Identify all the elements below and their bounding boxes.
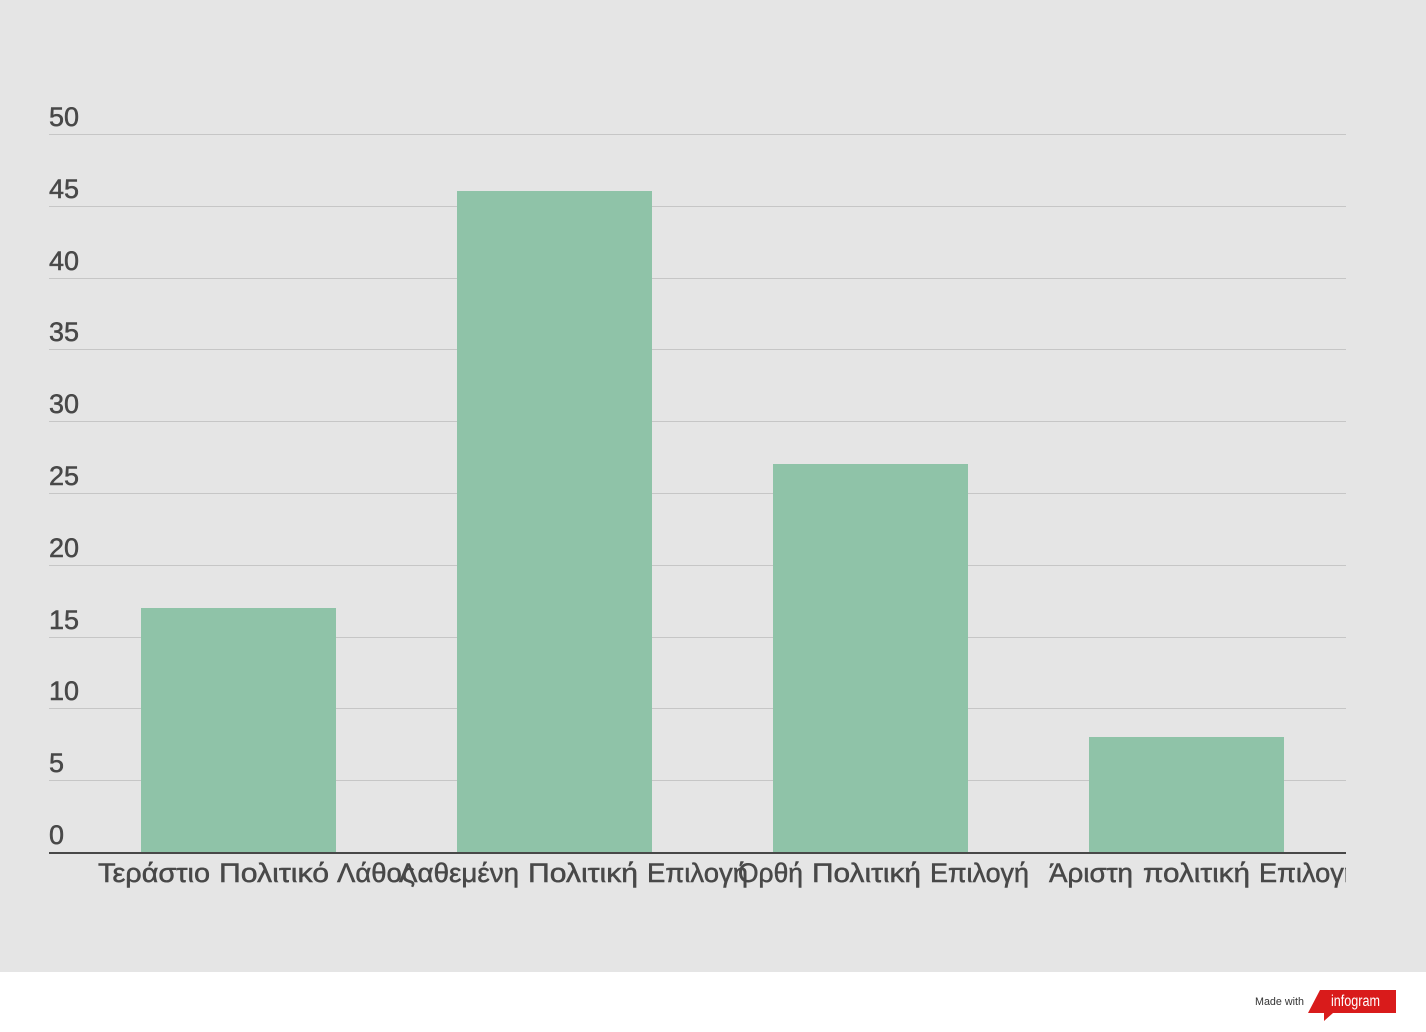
x axis category labels: Πολιτική — [528, 858, 638, 888]
footer: made with infogram: Made with — [1255, 996, 1304, 1008]
bar chart bars — [141, 191, 1284, 852]
y axis labels: 10 — [49, 676, 79, 706]
x axis category labels: Πολιτικό — [219, 858, 329, 888]
y axis labels: 35 — [49, 317, 79, 347]
y axis labels: 5 — [49, 748, 64, 778]
x axis category labels: πολιτική — [1143, 858, 1250, 888]
x axis category labels: Λάθος — [337, 858, 415, 888]
y axis labels: 40 — [49, 246, 79, 276]
x axis category labels: Άριστη — [1049, 858, 1133, 888]
icon: infogram logo — [1308, 990, 1396, 1021]
y axis labels: 20 — [49, 533, 79, 563]
y axis labels — [49, 102, 79, 850]
y axis labels: 15 — [49, 605, 79, 635]
x axis category labels — [98, 861, 1346, 888]
y axis labels: 50 — [49, 102, 79, 132]
x axis category labels: Επιλογή — [930, 858, 1029, 888]
x axis category labels: Επιλογή — [647, 858, 748, 888]
footer: made with infogram — [0, 972, 1426, 1032]
icon: infogram logo: infogram — [1331, 993, 1380, 1010]
y axis labels: 30 — [49, 389, 79, 419]
x axis category labels: Επιλογή — [1259, 858, 1359, 888]
x axis category labels: Πολιτική — [812, 858, 921, 888]
y axis labels: 25 — [49, 461, 79, 491]
y axis labels: 0 — [49, 820, 64, 850]
x axis category labels: Τεράστιο — [98, 858, 210, 888]
x axis category labels: Λαθεμένη — [399, 858, 519, 888]
x axis line — [49, 852, 1346, 854]
y axis labels: 45 — [49, 174, 79, 204]
x axis category labels: Ορθή — [738, 858, 803, 888]
